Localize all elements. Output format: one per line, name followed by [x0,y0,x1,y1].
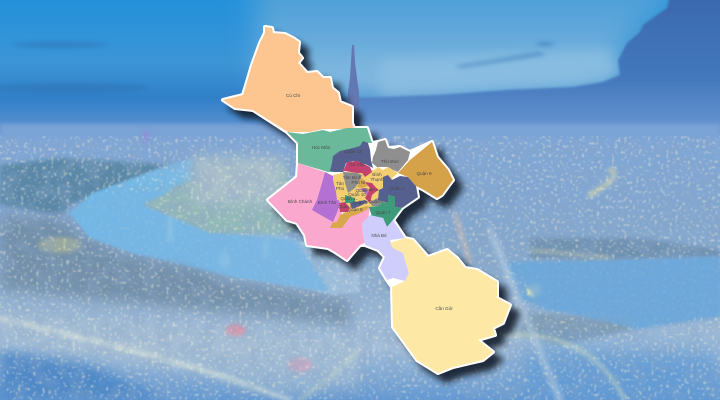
district: Quận 9 [398,142,453,198]
district: Quận 7: Quận 7 [375,210,391,215]
district: Quận 6 [337,202,353,212]
district: Nhà Bè [362,215,409,281]
district: Quận 5: Quận 5 [352,200,368,205]
district: Nhà Bè: Nhà Bè [371,233,387,238]
district: Quận 8: Quận 8 [347,207,363,212]
thin clouds [0,42,554,93]
district: Quận 2 [378,175,418,208]
district: Quận 11: Quận 11 [340,196,358,201]
icon: Landmark 81 tower [347,45,360,130]
district: Hóc Môn: Hóc Môn [312,145,331,150]
river overlay to calm the lights [70,190,330,292]
district: Quận 3: Quận 3 [363,187,379,192]
street glows [0,170,625,400]
district: Tân Phú: Phú [336,186,345,191]
district: Quận 1 [355,188,371,195]
district filler [336,170,396,216]
bottom right blue [520,345,720,400]
district: Quận 9: Quận 9 [416,171,432,176]
district: Quận 4 [368,198,384,206]
river left [70,160,360,295]
district: Cần Giờ [390,238,510,373]
bright sky centre [250,0,700,98]
district: Gò Vấp: Gò Vấp [349,162,365,167]
apartment blocks [192,156,284,204]
district: Bình Tân [312,172,340,222]
dark bank lower right [520,312,632,345]
sky [0,0,720,140]
horizon haze [0,124,720,138]
bottom blue [0,350,170,400]
district: Quận 6: Quận 6 [337,204,353,209]
district: Quận 12: Quận 12 [344,149,362,154]
district: Bình Thạnh: Bình [372,172,382,177]
district: Bình Chánh: Bình Chánh [288,199,313,204]
map: Ho Chi Minh City districts [223,27,518,381]
city lights [0,136,720,400]
district: Bình Tân: Bình Tân [318,200,337,205]
district: Gò Vấp [343,161,372,177]
district: Phú Nhuận: Phú Nhuận [352,180,375,185]
lower left bright area [0,315,360,395]
peninsula [142,165,300,234]
district: Tân Phú: Tân [336,181,344,186]
map shadow [231,35,518,381]
district: Quận 7 [369,195,402,227]
district: Quận 5 [350,200,368,209]
bright sky lower band [380,50,620,97]
district: Quận 11 [340,195,358,203]
district: Cần Giờ: Cần Giờ [435,306,453,311]
coloured lights [38,130,541,372]
dark bank right [530,238,720,260]
district: Quận 12 [330,141,373,172]
dark land [0,158,175,215]
district: Quận 4: Quận 4 [368,199,384,204]
district: Củ Chi [223,27,354,132]
district: Quận 3 [363,182,379,203]
city texture [0,136,720,400]
district: Quận 10 [348,188,366,200]
district: Quận 2: Quận 2 [389,186,405,191]
map white outline [223,27,510,373]
storm cloud [300,0,720,135]
river right [505,255,720,330]
district: Bình Thạnh [365,167,398,190]
land south of the river [0,215,350,325]
district: Thủ Đức: Thủ Đức [381,158,400,164]
district: Thủ Đức [372,140,410,172]
district: Bình Chánh [268,163,370,260]
district: Quận 10: Quận 10 [348,192,366,197]
district: Hóc Môn [287,128,372,172]
district: Tân Phú [333,173,348,202]
river overlay right [510,257,720,328]
district: Quận 8 [330,206,370,228]
district: Quận 1: Quận 1 [355,188,371,193]
district: Củ Chi: Củ Chi [286,92,300,98]
district: Tân Bình [343,172,362,195]
district: Bình Thạnh: Thạnh [370,177,384,182]
district: Phú Nhuận [352,178,375,188]
district: Tân Bình: Tân Bình [343,175,362,180]
city [0,134,720,400]
